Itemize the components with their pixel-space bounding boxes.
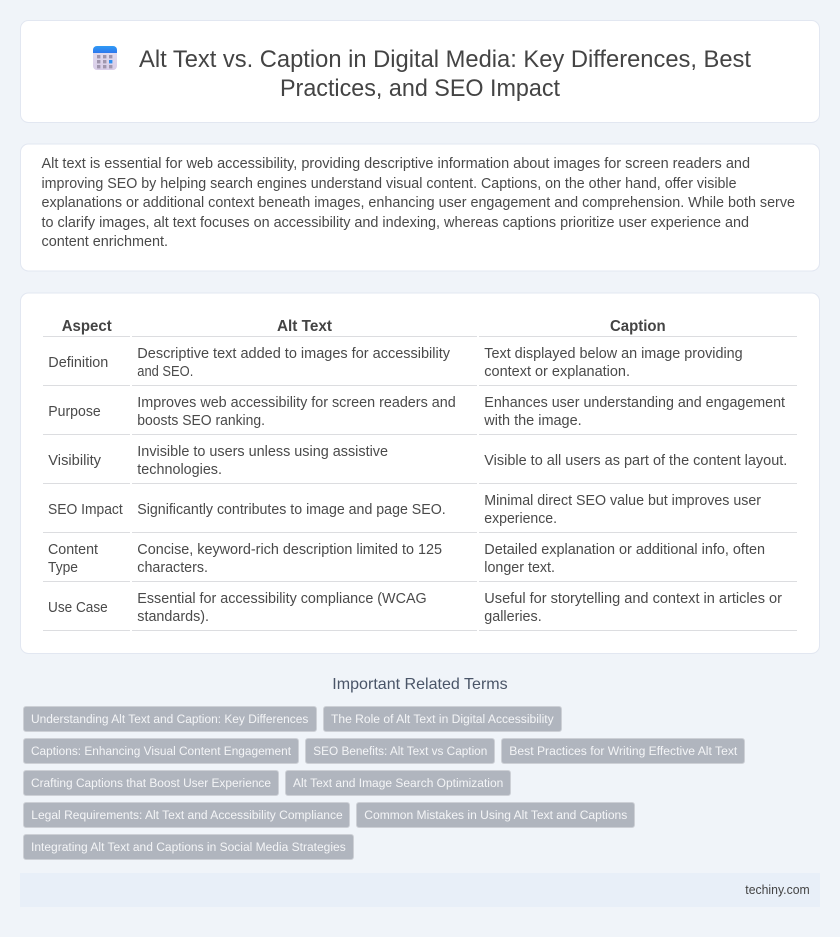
table row: Use Case: Essential for accessibility compliance (WCAG xyxy=(137,591,427,607)
table header row: Caption xyxy=(610,318,666,335)
table row: Content Type: longer text. xyxy=(484,560,555,576)
tag xyxy=(24,706,316,732)
table row: Purpose: with the image. xyxy=(483,413,582,429)
tag: SEO Benefits: Alt Text vs Caption xyxy=(313,744,487,758)
table row: SEO Impact: Significantly contributes to image and page SEO. xyxy=(137,502,446,518)
table row: Visibility: technologies. xyxy=(137,462,222,478)
panel: related term tags xyxy=(24,706,744,860)
table row: Use Case: standards). xyxy=(137,609,209,625)
table row: Use Case xyxy=(48,591,782,625)
intro text xyxy=(42,156,795,250)
table row: Definition xyxy=(48,346,743,380)
table row: Content Type: Concise, keyword-rich description limited to 125 xyxy=(137,542,442,558)
table row: Visibility xyxy=(48,444,787,478)
table row: Purpose: Purpose xyxy=(48,404,101,420)
tag xyxy=(356,802,634,828)
table row: Purpose: boosts SEO ranking. xyxy=(137,413,265,429)
table row: Content Type xyxy=(48,542,765,576)
tag xyxy=(24,770,278,796)
tag xyxy=(502,738,744,764)
table row: Visibility: Invisible to users unless using assistive xyxy=(137,444,388,460)
footer bar xyxy=(20,873,820,907)
table row: SEO Impact xyxy=(48,493,761,527)
panel: intro paragraph xyxy=(20,144,820,271)
tag: Integrating Alt Text and Captions in Social Media Strategies xyxy=(31,840,346,854)
intro text: content enrichment. xyxy=(42,234,168,250)
title xyxy=(139,46,751,102)
tag xyxy=(306,738,494,764)
table row: SEO Impact: Minimal direct SEO value but improves user xyxy=(484,493,761,509)
panel: header card xyxy=(20,20,820,122)
table row: Content Type: Content xyxy=(48,542,98,558)
intro text: improving SEO by helping search engines understand visual content. Captions, on the other hand, offer visible xyxy=(42,176,736,192)
tag: Understanding Alt Text and Caption: Key Differences xyxy=(31,712,308,726)
tag xyxy=(24,802,350,828)
table header row: Aspect xyxy=(62,318,112,335)
tag: Legal Requirements: Alt Text and Accessibility Compliance xyxy=(31,808,343,822)
tag xyxy=(324,706,562,732)
tag: Captions: Enhancing Visual Content Engagement xyxy=(31,744,292,758)
table row: SEO Impact: experience. xyxy=(484,511,557,527)
table row: Visibility: Visible to all users as part of the content layout. xyxy=(484,453,787,469)
footer source label: techiny.com xyxy=(745,882,810,897)
table row: Definition: Text displayed below an image providing xyxy=(484,346,743,362)
icon: calendar xyxy=(93,46,117,70)
table row: Definition: Descriptive text added to images for accessibility xyxy=(137,346,451,362)
tag xyxy=(286,770,510,796)
intro text: Alt text is essential for web accessibility, providing descriptive information about images for screen readers and xyxy=(42,156,750,172)
table row: Content Type: Detailed explanation or additional info, often xyxy=(484,542,765,558)
table header row xyxy=(62,318,666,335)
table row: Definition: context or explanation. xyxy=(484,364,630,380)
table row: Content Type: Type xyxy=(48,560,78,576)
table row: Use Case: Use Case xyxy=(48,600,108,616)
table row: Use Case: galleries. xyxy=(484,609,542,625)
tag: Crafting Captions that Boost User Experience xyxy=(31,776,271,790)
panel: comparison table xyxy=(20,293,820,654)
tag: Alt Text and Image Search Optimization xyxy=(293,776,503,790)
table row: Content Type: characters. xyxy=(137,560,208,576)
tag: The Role of Alt Text in Digital Accessibility xyxy=(331,712,555,726)
heading: important related terms: Important Related Terms xyxy=(332,676,508,693)
table row: Purpose xyxy=(48,395,785,429)
title: Alt Text vs. Caption in Digital Media: Key Differences, Best xyxy=(139,46,751,73)
intro text: explanations or additional context beneath images, enhancing user engagement and comprehension. While both serve xyxy=(42,195,795,211)
table row: SEO Impact: SEO Impact xyxy=(48,502,123,518)
intro text: to clarify images, alt text focuses on accessibility and indexing, whereas captions prioritize user experience and xyxy=(42,215,749,231)
table row: Purpose: Enhances user understanding and engagement xyxy=(484,395,785,411)
title: Practices, and SEO Impact xyxy=(280,75,560,102)
table row: Definition: and SEO. xyxy=(137,364,193,380)
tag: Best Practices for Writing Effective Alt Text xyxy=(509,744,738,758)
table header row: Alt Text xyxy=(277,318,333,335)
table row: Purpose: Improves web accessibility for screen readers and xyxy=(137,395,456,411)
table row: Visibility: Visibility xyxy=(48,453,102,469)
table row: Definition: Definition xyxy=(48,355,108,371)
table row: Use Case: Useful for storytelling and context in articles or xyxy=(484,591,782,607)
tag xyxy=(24,738,298,764)
tag xyxy=(24,834,354,860)
tag: Common Mistakes in Using Alt Text and Captions xyxy=(364,808,627,822)
